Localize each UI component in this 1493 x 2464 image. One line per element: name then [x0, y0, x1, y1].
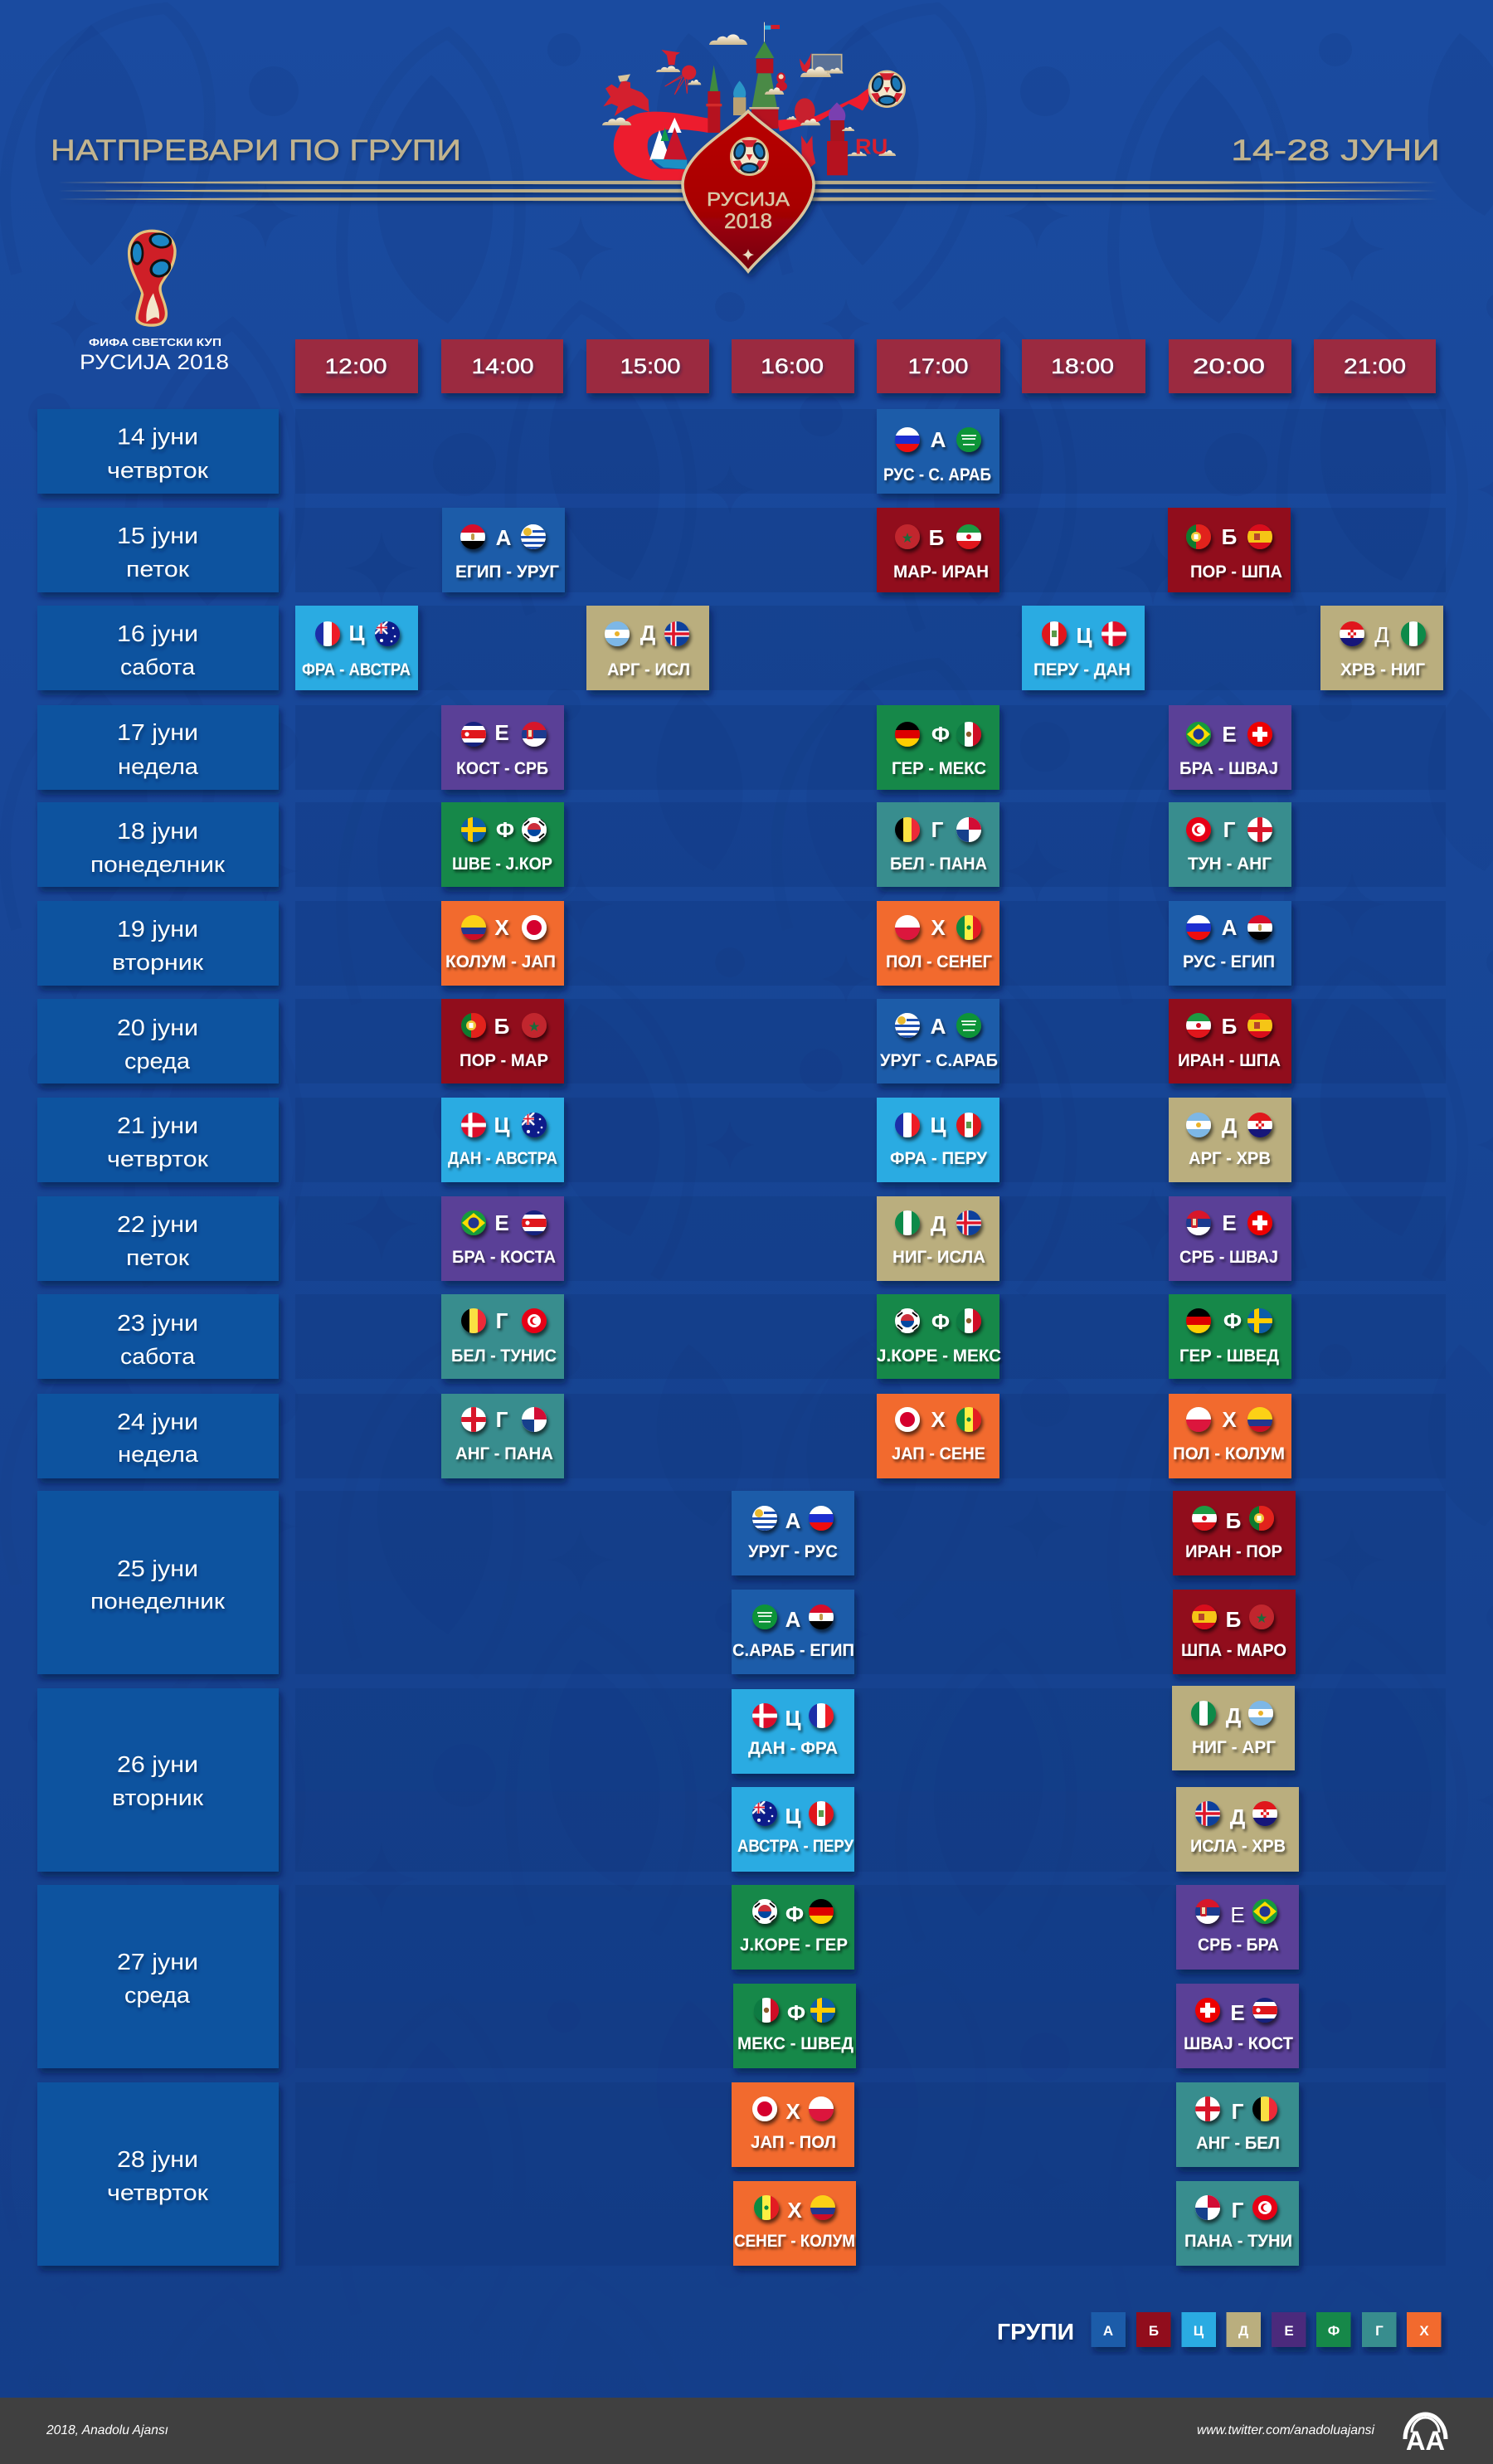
match: ИРАН - ПОР: ИРАН - ПОР — [1185, 1542, 1282, 1561]
match: ДАН - АВСТРА — [441, 1098, 564, 1182]
17 јуни — [37, 705, 279, 790]
match: БЕЛ - ПАНА — [877, 802, 999, 887]
mountains — [649, 118, 687, 169]
match: БРА - КОСТА — [441, 1196, 564, 1281]
egg — [795, 98, 815, 124]
match: ШПА - МАРО: ШПА - МАРО — [1181, 1641, 1286, 1660]
17 јуни: 17 јуни — [117, 719, 198, 745]
15 јуни — [37, 508, 279, 592]
match: ПОЛ - СЕНЕГ — [877, 901, 999, 986]
match: ШВЕ - Ј.КОР — [441, 802, 564, 887]
match: Ј.КОРЕ - МЕКС — [877, 1294, 1001, 1379]
match: ГЕР - МЕКС: ГЕР - МЕКС — [892, 759, 986, 778]
match: МЕКС - ШВЕД: МЕКС - ШВЕД — [737, 2034, 853, 2053]
match: ЕГИП - УРУГ — [442, 508, 565, 592]
match: НИГ- ИСЛА: Д — [931, 1211, 946, 1236]
match: ШВАЈ - КОСТ: Е — [1230, 2000, 1245, 2025]
match: ТУН - АНГ: ТУН - АНГ — [1188, 855, 1272, 874]
21 јуни — [37, 1098, 279, 1182]
21:00: 21:00 — [1344, 355, 1406, 378]
match: ПОЛ - КОЛУМ — [1169, 1394, 1291, 1478]
match: АНГ - ПАНА: Г — [496, 1407, 508, 1432]
match: БЕЛ - ПАНА: БЕЛ - ПАНА — [890, 855, 987, 874]
match: ЈАП - СЕНЕ: ЈАП - СЕНЕ — [892, 1444, 985, 1463]
match cards — [295, 409, 1443, 2266]
match: ДАН - ФРА: Ц — [785, 1706, 801, 1731]
26 јуни — [37, 1688, 279, 1872]
21 јуни: четврток — [107, 1147, 208, 1171]
match: ИРАН - ШПА: Б — [1222, 1014, 1237, 1039]
19 јуни: вторник — [112, 950, 203, 975]
net and figure — [800, 52, 842, 72]
match: МАР- ИРАН: МАР- ИРАН — [893, 562, 989, 582]
26 јуни: вторник — [112, 1785, 203, 1810]
match: ДАН - АВСТРА: ДАН - АВСТРА — [448, 1149, 557, 1168]
legend A: А — [1103, 2323, 1113, 2339]
right ribbon — [777, 88, 868, 131]
match: АРГ - ХРВ: Д — [1222, 1113, 1238, 1138]
legend Г — [1362, 2312, 1397, 2347]
match: ДАН - ФРА — [732, 1689, 854, 1774]
match: РУС - ЕГИП: РУС - ЕГИП — [1183, 952, 1275, 971]
match: ШПА - МАРО — [1173, 1590, 1296, 1674]
date range: 14-28 ЈУНИ — [1231, 134, 1440, 167]
figure and sputnik — [661, 50, 696, 95]
match: ПОЛ - КОЛУМ: ПОЛ - КОЛУМ — [1173, 1444, 1285, 1463]
footer — [0, 2398, 1493, 2464]
legend Е: Е — [1284, 2323, 1294, 2339]
date column — [37, 409, 279, 2266]
match: ИРАН - ШПА — [1169, 999, 1291, 1083]
match: АРГ - ИСЛ: Д — [640, 621, 656, 645]
15:00: 15:00 — [620, 355, 680, 378]
legend Ц: Ц — [1194, 2323, 1204, 2339]
match: ЕГИП - УРУГ: А — [496, 525, 512, 550]
match: ПОЛ - СЕНЕГ: ПОЛ - СЕНЕГ — [886, 952, 992, 971]
match: ГЕР - МЕКС: Ф — [931, 722, 950, 747]
match: РУС - ЕГИП — [1169, 901, 1291, 986]
legend: groups — [997, 2312, 1442, 2347]
match: БРА - ШВАЈ: БРА - ШВАЈ — [1179, 759, 1278, 778]
match: БРА - ШВАЈ: Е — [1222, 722, 1237, 747]
onion dome — [733, 80, 746, 115]
match: ДАН - АВСТРА: Ц — [494, 1113, 509, 1137]
match: БРА - КОСТА: БРА - КОСТА — [452, 1248, 556, 1267]
match: ПОЛ - КОЛУМ: Х — [1222, 1407, 1237, 1432]
legend Б: Б — [1149, 2323, 1159, 2339]
twitter link: www.twitter.com/anadoluajansi — [1197, 2423, 1374, 2437]
legend A — [1092, 2312, 1126, 2347]
match: ПОР - МАР — [441, 999, 564, 1083]
match: СРБ - ШВАЈ — [1169, 1196, 1291, 1281]
credit: 2018, Anadolu Ajansı — [46, 2423, 168, 2437]
match: НИГ - АРГ: НИГ - АРГ — [1192, 1738, 1276, 1757]
match: ПЕРУ - ДАН: Ц — [1077, 623, 1092, 648]
match: ФРА - АВСТРА: ФРА - АВСТРА — [302, 660, 411, 679]
18 јуни — [37, 802, 279, 887]
match: БРА - КОСТА: Е — [494, 1210, 509, 1235]
logo line 2: РУСИЈА 2018 — [80, 351, 229, 374]
match: БРА - ШВАЈ — [1169, 705, 1291, 790]
16 јуни: 16 јуни — [117, 621, 198, 646]
match: ИРАН - ПОР — [1173, 1491, 1296, 1575]
match: РУС - С. АРАБ: А — [931, 427, 946, 452]
legend Е — [1272, 2312, 1306, 2347]
16 јуни — [37, 606, 279, 690]
19 јуни — [37, 901, 279, 986]
match: ХРВ - НИГ: Д — [1374, 622, 1389, 647]
match: НИГ- ИСЛА — [877, 1196, 999, 1281]
25 јуни — [37, 1491, 279, 1674]
legend Ф: Ф — [1328, 2323, 1340, 2339]
match: ШВЕ - Ј.КОР: Ф — [496, 817, 514, 842]
21 јуни: 21 јуни — [117, 1113, 198, 1138]
25 јуни: 25 јуни — [117, 1556, 198, 1581]
14:00 — [441, 339, 563, 393]
time headers — [295, 339, 1436, 393]
match: КОСТ - СРБ: КОСТ - СРБ — [456, 759, 548, 778]
24 јуни — [37, 1394, 279, 1478]
28 јуни — [37, 2082, 279, 2266]
header rules — [57, 181, 1437, 201]
match: МАР- ИРАН: Б — [929, 525, 944, 550]
match: ФРА - АВСТРА: Ц — [348, 621, 365, 645]
match: Ј.КОРЕ - МЕКС: Ф — [931, 1309, 950, 1334]
12:00: 12:00 — [325, 355, 387, 378]
ball with ribbon — [868, 71, 906, 108]
match: ЈАП - ПОЛ — [732, 2082, 854, 2167]
match: СЕНЕГ - КОЛУМ: Х — [787, 2198, 802, 2223]
match: БЕЛ - ТУНИС: Г — [496, 1308, 508, 1333]
match: ЈАП - СЕНЕ — [877, 1394, 999, 1478]
match: ПОР - ШПА — [1168, 508, 1291, 592]
match: РУС - С. АРАБ: РУС - С. АРАБ — [883, 465, 991, 485]
match: С.АРАБ - ЕГИП — [732, 1590, 854, 1674]
match: ПОР - ШПА: Б — [1222, 524, 1237, 549]
shield ball — [730, 137, 769, 176]
match: С.АРАБ - ЕГИП: С.АРАБ - ЕГИП — [732, 1641, 854, 1660]
ribbon — [614, 112, 708, 180]
match: СЕНЕГ - КОЛУМ: СЕНЕГ - КОЛУМ — [734, 2232, 855, 2251]
24 јуни: 24 јуни — [117, 1409, 198, 1434]
match: АВСТРА - ПЕРУ: Ц — [785, 1804, 801, 1829]
15 јуни: петок — [126, 557, 189, 582]
schedule row bands — [295, 409, 1446, 2266]
match: СРБ - ШВАЈ: СРБ - ШВАЈ — [1179, 1248, 1278, 1267]
18:00: 18:00 — [1051, 355, 1114, 378]
horses — [603, 74, 649, 116]
match: УРУГ - РУС — [732, 1491, 854, 1575]
14 јуни: 14 јуни — [117, 423, 198, 450]
match: УРУГ - С.АРАБ: А — [931, 1014, 946, 1039]
14:00: 14:00 — [471, 355, 534, 378]
match: БЕЛ - ТУНИС: БЕЛ - ТУНИС — [451, 1346, 557, 1366]
match: СРБ - БРА: СРБ - БРА — [1198, 1936, 1279, 1955]
24 јуни: недела — [118, 1442, 199, 1467]
match: БЕЛ - ПАНА: Г — [931, 817, 944, 842]
match: КОЛУМ - ЈАП: Х — [494, 915, 509, 940]
legend Д: Д — [1238, 2323, 1248, 2339]
14 јуни — [37, 409, 279, 494]
27 јуни: 27 јуни — [117, 1949, 198, 1975]
AA logo — [1405, 2414, 1446, 2456]
right tower — [827, 102, 848, 175]
match: ФРА - АВСТРА — [295, 606, 418, 690]
12:00 — [295, 339, 418, 393]
17 јуни: недела — [118, 754, 199, 779]
27 јуни: среда — [124, 1983, 191, 2008]
16:00: 16:00 — [761, 355, 824, 378]
legend Х — [1407, 2312, 1442, 2347]
match: АНГ - ПАНА — [441, 1394, 564, 1478]
main tower — [749, 22, 780, 129]
match: УРУГ - РУС: УРУГ - РУС — [748, 1542, 838, 1561]
match: БЕЛ - ТУНИС — [441, 1294, 564, 1379]
match: УРУГ - РУС: А — [785, 1508, 801, 1533]
match: ПАНА - ТУНИ: ПАНА - ТУНИ — [1184, 2232, 1292, 2251]
match: НИГ - АРГ: Д — [1226, 1703, 1242, 1728]
figure right — [801, 135, 815, 168]
match: ГЕР - МЕКС — [877, 705, 999, 790]
match: Ј.КОРЕ - ГЕР — [732, 1885, 854, 1970]
27 јуни — [37, 1885, 279, 2068]
clouds — [602, 34, 896, 156]
FIFA logo — [80, 230, 229, 374]
match: АВСТРА - ПЕРУ: АВСТРА - ПЕРУ — [737, 1837, 854, 1856]
match: АРГ - ИСЛ: АРГ - ИСЛ — [607, 660, 690, 679]
match: АВСТРА - ПЕРУ — [732, 1787, 854, 1872]
20 јуни — [37, 999, 279, 1083]
match: НИГ- ИСЛА: НИГ- ИСЛА — [892, 1248, 985, 1267]
match: ШВАЈ - КОСТ: ШВАЈ - КОСТ — [1184, 2034, 1293, 2053]
match: ЕГИП - УРУГ: ЕГИП - УРУГ — [455, 562, 559, 582]
26 јуни: 26 јуни — [117, 1751, 198, 1777]
match: АНГ - БЕЛ — [1176, 2082, 1299, 2167]
match: РУС - С. АРАБ — [877, 409, 999, 494]
22 јуни: петок — [126, 1245, 189, 1270]
match: МАР- ИРАН — [877, 508, 999, 592]
match: ЈАП - СЕНЕ: Х — [931, 1407, 946, 1432]
match: КОСТ - СРБ: Е — [494, 720, 509, 745]
match: МЕКС - ШВЕД — [733, 1984, 856, 2068]
match: ХРВ - НИГ: ХРВ - НИГ — [1340, 660, 1425, 679]
match: ПОЛ - СЕНЕГ: Х — [931, 915, 946, 940]
match: Ј.КОРЕ - ГЕР: Ф — [785, 1902, 804, 1926]
match: ПЕРУ - ДАН: ПЕРУ - ДАН — [1033, 660, 1131, 679]
match: ЈАП - ПОЛ: ЈАП - ПОЛ — [751, 2133, 836, 2152]
shield star — [742, 249, 754, 261]
match: ФРА - ПЕРУ: ФРА - ПЕРУ — [890, 1149, 988, 1168]
match: АНГ - ПАНА: АНГ - ПАНА — [455, 1444, 553, 1463]
match: ПОР - МАР: ПОР - МАР — [460, 1051, 548, 1070]
legend Б — [1136, 2312, 1171, 2347]
16 јуни: сабота — [120, 655, 196, 679]
match: АРГ - ИСЛ — [586, 606, 709, 690]
match: ХРВ - НИГ — [1320, 606, 1443, 690]
16:00 — [732, 339, 854, 393]
match: ПОР - ШПА: ПОР - ШПА — [1190, 562, 1282, 582]
23 јуни: 23 јуни — [117, 1310, 198, 1336]
match: КОЛУМ - ЈАП — [441, 901, 564, 986]
match: АРГ - ХРВ — [1169, 1098, 1291, 1182]
match: ФРА - ПЕРУ — [877, 1098, 999, 1182]
19 јуни: 19 јуни — [117, 916, 198, 942]
22 јуни — [37, 1196, 279, 1281]
legend Ф — [1316, 2312, 1350, 2347]
match: ФРА - ПЕРУ: Ц — [931, 1113, 946, 1137]
18 јуни: понеделник — [90, 852, 225, 877]
20 јуни: 20 јуни — [117, 1015, 198, 1040]
23 јуни — [37, 1294, 279, 1379]
match: ИСЛА - ХРВ: ИСЛА - ХРВ — [1190, 1837, 1286, 1856]
match: ИРАН - ШПА: ИРАН - ШПА — [1178, 1051, 1281, 1070]
match: МЕКС - ШВЕД: Ф — [787, 2000, 805, 2025]
22 јуни: 22 јуни — [117, 1211, 198, 1237]
28 јуни: 28 јуни — [117, 2146, 198, 2172]
match: Ј.КОРЕ - ГЕР: Ј.КОРЕ - ГЕР — [740, 1936, 848, 1955]
legend Ц — [1181, 2312, 1216, 2347]
match: НИГ - АРГ — [1172, 1686, 1295, 1770]
legend Г: Г — [1375, 2323, 1384, 2339]
match: КОЛУМ - ЈАП: КОЛУМ - ЈАП — [445, 952, 556, 971]
match: КОСТ - СРБ — [441, 705, 564, 790]
shield title: РУСИЈА — [707, 188, 790, 210]
match: ПАНА - ТУНИ: Г — [1232, 2198, 1244, 2223]
15:00 — [586, 339, 709, 393]
legend Х: Х — [1419, 2323, 1429, 2339]
emblem: Русија 2018 shield — [683, 111, 814, 271]
match: РУС - ЕГИП: А — [1222, 915, 1238, 940]
trophy — [128, 230, 177, 327]
match: АРГ - ХРВ: АРГ - ХРВ — [1189, 1149, 1271, 1168]
shield year: 2018 — [724, 210, 772, 233]
20:00 — [1169, 339, 1291, 393]
match: ГЕР - ШВЕД: ГЕР - ШВЕД — [1179, 1346, 1279, 1366]
match: ЈАП - ПОЛ: Х — [785, 2099, 800, 2124]
nesting doll — [776, 72, 787, 91]
match: ПЕРУ - ДАН — [1022, 606, 1145, 690]
AA logo: AA — [1406, 2426, 1445, 2456]
left tower — [706, 65, 722, 133]
17:00 — [877, 339, 1000, 393]
15 јуни: 15 јуни — [117, 523, 198, 548]
match: СРБ - БРА — [1176, 1885, 1299, 1970]
14 јуни: четврток — [107, 458, 208, 483]
17:00: 17:00 — [907, 355, 969, 378]
match: С.АРАБ - ЕГИП: А — [785, 1607, 801, 1632]
illustration: russian landmarks — [602, 22, 906, 180]
match: ГЕР - ШВЕД: Ф — [1223, 1308, 1242, 1333]
match: ПОР - МАР: Б — [494, 1014, 509, 1039]
23 јуни: сабота — [120, 1344, 196, 1369]
21:00 — [1314, 339, 1436, 393]
match: Ј.КОРЕ - МЕКС: Ј.КОРЕ - МЕКС — [877, 1346, 1001, 1366]
25 јуни: понеделник — [90, 1589, 225, 1614]
match: ГЕР - ШВЕД — [1169, 1294, 1291, 1379]
match: ТУН - АНГ: Г — [1223, 817, 1236, 842]
match: СРБ - ШВАЈ: Е — [1222, 1210, 1237, 1235]
18 јуни: 18 јуни — [117, 818, 198, 844]
match: УРУГ - С.АРАБ — [877, 999, 999, 1083]
20 јуни: среда — [124, 1049, 191, 1074]
match: УРУГ - С.АРАБ: УРУГ - С.АРАБ — [880, 1051, 998, 1070]
match: ТУН - АНГ — [1169, 802, 1291, 887]
20:00: 20:00 — [1193, 355, 1265, 378]
match: ИРАН - ПОР: Б — [1226, 1508, 1241, 1533]
match: ПАНА - ТУНИ — [1176, 2181, 1299, 2266]
match: АНГ - БЕЛ: АНГ - БЕЛ — [1196, 2134, 1280, 2153]
18:00 — [1022, 339, 1145, 393]
match: ИСЛА - ХРВ: Д — [1230, 1804, 1246, 1829]
title: НАТПРЕВАРИ ПО ГРУПИ — [51, 134, 461, 167]
match: ШВАЈ - КОСТ — [1176, 1984, 1299, 2068]
match: ШВЕ - Ј.КОР: ШВЕ - Ј.КОР — [452, 855, 552, 874]
match: АНГ - БЕЛ: Г — [1232, 2099, 1244, 2124]
match: ИСЛА - ХРВ — [1176, 1787, 1299, 1872]
match: ШПА - МАРО: Б — [1226, 1607, 1241, 1632]
legend Д — [1226, 2312, 1261, 2347]
match: СРБ - БРА: Е — [1230, 1902, 1245, 1927]
legend title: ГРУПИ — [997, 2319, 1074, 2345]
logo line 1: ФИФА СВЕТСКИ КУП — [89, 336, 221, 348]
28 јуни: четврток — [107, 2180, 208, 2205]
match: СЕНЕГ - КОЛУМ — [733, 2181, 856, 2266]
match: ДАН - ФРА: ДАН - ФРА — [748, 1739, 838, 1758]
ru label: RU — [855, 134, 888, 158]
